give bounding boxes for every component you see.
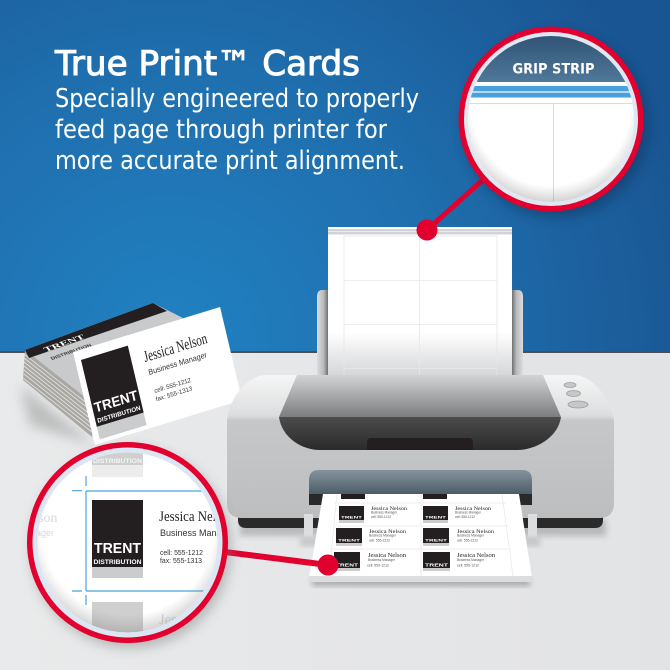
card row 2: cell: 555-1212 xyxy=(455,515,475,519)
card row 3: Business Manager xyxy=(369,534,397,538)
ghost card below xyxy=(92,602,176,632)
card row 2: Jessica Nelson xyxy=(455,506,491,512)
printer body xyxy=(227,375,614,518)
card logo: TRENT xyxy=(93,387,140,416)
output hood xyxy=(309,470,532,494)
card row 2 xyxy=(339,506,491,523)
magnified contact text: Jessica Nelson xyxy=(159,509,235,525)
magnified contact text: cell: 555-1212 xyxy=(160,550,203,557)
callout: card alignment magnifier xyxy=(27,442,235,648)
magnified contact text: fax: 555-1313 xyxy=(160,558,202,565)
card row 3: Jessica Nelson xyxy=(457,529,494,535)
printer floor shadow xyxy=(240,520,606,536)
printer buttons xyxy=(564,382,588,408)
ghost neighbouring text: son xyxy=(38,511,57,526)
card row 2: cell: 555-1212 xyxy=(371,515,391,519)
card row 2: Business Manager xyxy=(371,510,398,514)
magnified logo xyxy=(92,500,143,578)
card row 4 xyxy=(334,552,495,571)
description text: feed page through printer for xyxy=(55,115,387,145)
connector: print alignment callout xyxy=(225,552,338,576)
card fax: fax: 555-1313 xyxy=(155,385,194,403)
front white card xyxy=(73,307,242,445)
printer base xyxy=(238,515,603,528)
card logo: DISTRIBUTION xyxy=(97,405,142,425)
magnified contact text xyxy=(159,512,218,563)
title: True Print™ Cards xyxy=(54,44,360,84)
output paper xyxy=(309,494,533,582)
description text xyxy=(55,84,419,176)
output slot xyxy=(300,494,540,546)
card row 3: cell: 555-1212 xyxy=(457,538,478,542)
card row 4: Jessica Nelson xyxy=(457,553,495,559)
input paper guides xyxy=(317,290,523,375)
card row 2: Business Manager xyxy=(455,510,482,514)
card name: Jessica Nelson xyxy=(142,330,209,366)
input paper sheet xyxy=(328,227,512,381)
grip strip label: GRIP STRIP xyxy=(512,62,594,78)
card row 4: Business Manager xyxy=(368,558,396,562)
printed cards xyxy=(334,494,495,571)
alignment guide lines xyxy=(72,476,215,605)
magnified logo: TRENT xyxy=(94,541,141,557)
card logo xyxy=(81,346,147,439)
floor surface xyxy=(0,352,670,670)
output paper shadow xyxy=(312,578,530,586)
ghost neighbouring text: ager xyxy=(36,528,54,538)
ghost card above xyxy=(92,452,143,477)
magnified logo: DISTRIBUTION xyxy=(94,559,142,566)
card row 3: Business Manager xyxy=(457,534,485,538)
top card of the stack xyxy=(25,303,183,405)
card row 4: Business Manager xyxy=(457,558,485,562)
card row 4: cell: 555-1212 xyxy=(367,564,389,568)
business card stack: DISTRIBUTION xyxy=(50,343,93,361)
card row 2: TRENT xyxy=(341,514,363,520)
stack shadow xyxy=(20,385,95,445)
background wall xyxy=(0,0,670,352)
callout: grip strip magnifier xyxy=(458,26,650,217)
card row 3: TRENT xyxy=(425,538,448,542)
card row 1 xyxy=(341,494,447,499)
card row 3 xyxy=(336,528,494,546)
card row 4: cell: 555-1212 xyxy=(457,564,479,568)
ghost neighbouring text xyxy=(38,516,58,538)
stack logo text: TRENT xyxy=(42,333,87,353)
ghost card above: DISTRIBUTION xyxy=(93,458,142,465)
description text: more accurate print alignment. xyxy=(55,146,405,176)
card row 2: TRENT xyxy=(425,514,447,520)
printer xyxy=(227,227,614,586)
card row 3: TRENT xyxy=(338,538,361,542)
ghost card below: Jess xyxy=(159,612,183,628)
stack edges xyxy=(23,350,95,437)
card row 4: TRENT xyxy=(336,562,359,568)
card row 4: Jessica Nelson xyxy=(368,553,406,559)
card role: Business Manager xyxy=(147,350,208,377)
description text: Specially engineered to properly xyxy=(55,84,419,114)
printer lid xyxy=(279,375,561,450)
card row 4: TRENT xyxy=(425,562,449,568)
business card stack xyxy=(20,303,242,445)
magnified contact text: Business Manager xyxy=(160,528,235,538)
card row 3: Jessica Nelson xyxy=(369,529,406,535)
connector: grip strip callout xyxy=(416,178,485,240)
card row 2: Jessica Nelson xyxy=(371,506,407,512)
card phone: cell: 555-1212 xyxy=(154,377,192,395)
card row 3: cell: 555-1212 xyxy=(369,538,390,542)
